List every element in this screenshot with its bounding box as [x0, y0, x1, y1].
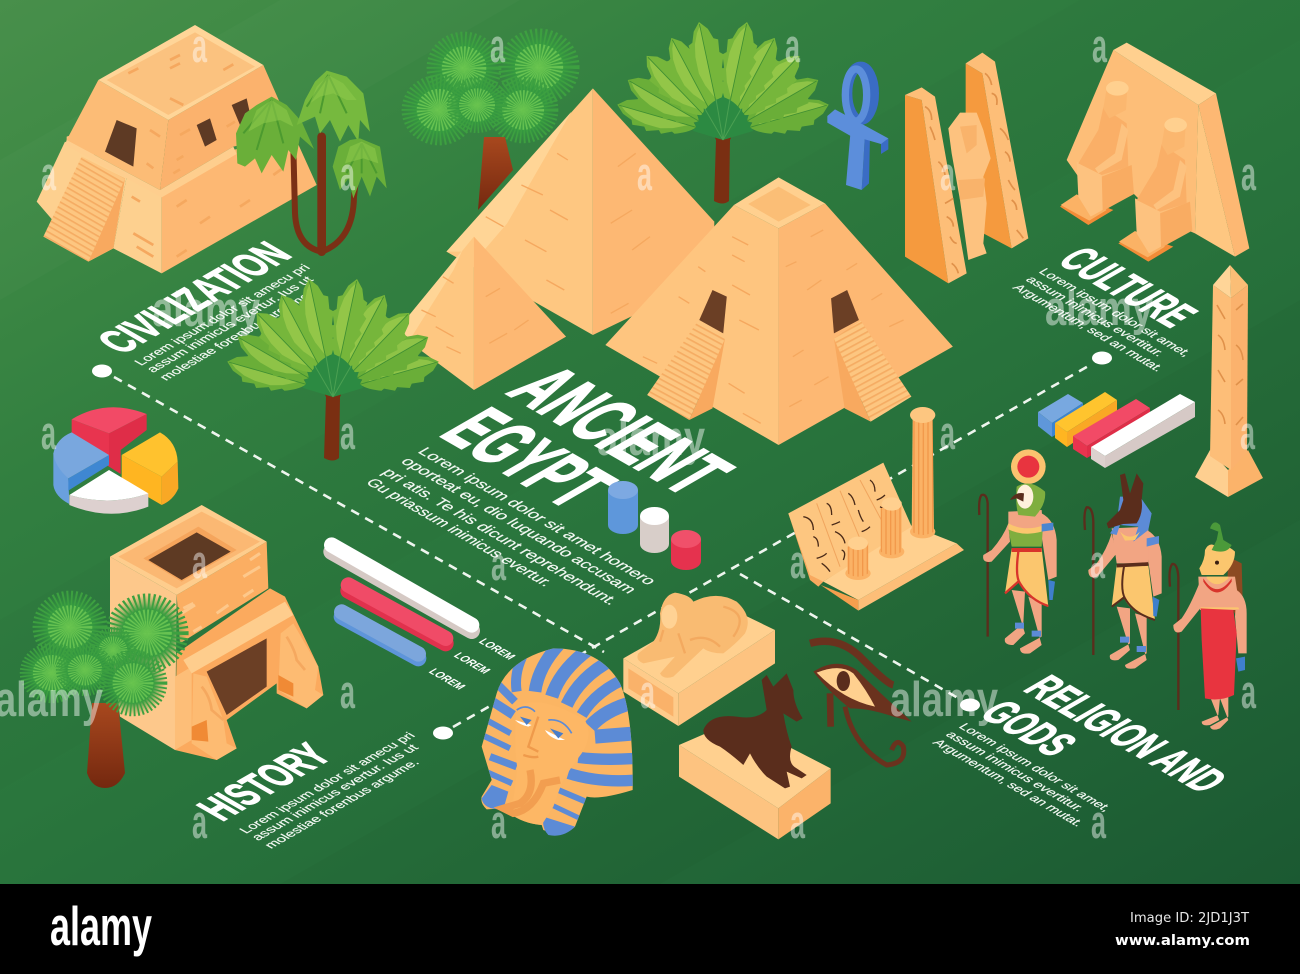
red block	[1073, 399, 1150, 458]
bar chart: rounded rods	[332, 545, 472, 658]
text: culture body: Argumentum, sed an mutat.	[1009, 282, 1168, 374]
left stairs	[647, 321, 725, 420]
yellow slice	[122, 432, 178, 505]
ankh in hand	[1048, 580, 1159, 617]
watermark: repeated a marks: a	[790, 795, 805, 848]
house: civilization	[37, 25, 317, 273]
watermark: repeated a marks: a	[1241, 147, 1256, 200]
watermark: repeated a marks: a	[1240, 406, 1255, 459]
labels: lorem	[425, 636, 519, 692]
jackal on plinth	[679, 673, 831, 839]
watermark: repeated a marks: a	[192, 795, 207, 848]
watermark: alamy words: alamy	[152, 283, 260, 337]
eye of horus	[810, 641, 912, 765]
temple with seated statues	[1060, 43, 1249, 262]
watermark: repeated a marks: a	[491, 537, 506, 590]
text: religion body	[929, 721, 1116, 829]
twin palm trees	[236, 71, 387, 252]
hieroglyph tablet	[788, 463, 912, 587]
text: history body: Lorem ipsum dolor sit amecu pri	[236, 730, 418, 836]
red cylinder	[671, 530, 701, 570]
watermark: repeated a marks: a	[192, 535, 207, 588]
heading: religion and gods	[969, 668, 1239, 799]
watermark: repeated a marks: a	[1092, 19, 1107, 72]
labels: lorem: LOREM	[425, 666, 469, 692]
medium broken column	[879, 497, 904, 558]
node dot: history	[433, 726, 453, 740]
watermark: repeated a marks: a	[940, 147, 955, 200]
footer bar	[0, 884, 1300, 974]
heading: religion and gods: GODS	[969, 693, 1089, 763]
white rod	[332, 545, 472, 631]
labels: lorem: LOREM	[475, 636, 519, 662]
footer bar: alamy	[50, 895, 152, 957]
text: civilization body: molestiae forenbus argume.	[156, 289, 318, 383]
node dot: civilization	[92, 364, 112, 378]
small broken column	[845, 537, 871, 580]
heading: ancient egypt	[422, 355, 751, 520]
blue slice	[53, 432, 109, 504]
watermark: repeated a marks: a	[1090, 535, 1105, 588]
lintel	[183, 602, 293, 673]
watermark: repeated a marks: a	[41, 406, 56, 459]
lower gate frame	[175, 588, 323, 760]
sphinx on plinth	[623, 593, 775, 726]
text: history body: assum inimicus evertur. Ius ut	[248, 742, 422, 843]
blue cylinder	[608, 481, 638, 534]
mask face	[503, 702, 588, 825]
text: religion body: Argumentum, sed an mutat.	[929, 737, 1088, 829]
text: religion body: Lorem ipsum dolor sit amet,	[955, 721, 1116, 814]
watermark: repeated a marks	[41, 19, 1256, 848]
watermark: repeated a marks: a	[192, 19, 207, 72]
blue rod	[342, 612, 418, 658]
carved slabs with figure	[905, 53, 1028, 283]
god figures	[979, 449, 1247, 730]
watermark: repeated a marks: a	[940, 406, 955, 459]
fan palm: top centre	[612, 18, 834, 204]
figure: anubis	[1084, 473, 1162, 669]
stairs	[88, 178, 125, 262]
house: history	[110, 505, 323, 760]
cylinders chart	[608, 481, 701, 570]
text: culture body	[1009, 266, 1196, 374]
watermark: alamy words: alamy	[1045, 282, 1153, 336]
spiky palm: top centre	[403, 30, 578, 210]
heading: civilization: CIVILIZATION	[86, 235, 302, 360]
watermark: alamy words	[0, 282, 1153, 727]
text: culture body: assum inimicus evertitur.	[1022, 274, 1169, 359]
heading: ancient egypt: EGYPT	[422, 397, 634, 520]
watermark: repeated a marks: a	[340, 665, 355, 718]
watermark: repeated a marks: a	[490, 19, 505, 72]
watermark: repeated a marks: a	[640, 665, 655, 718]
figure: horus	[979, 449, 1057, 654]
right door	[831, 290, 859, 333]
watermark: alamy words: alamy	[597, 412, 705, 466]
red slice	[72, 407, 147, 474]
heading: culture: CULTURE	[1046, 241, 1208, 334]
dashed flow lines with node dots	[114, 364, 1092, 727]
yellow block	[1055, 392, 1117, 447]
text: culture body: Lorem ipsum dolor sit amet,	[1035, 266, 1196, 359]
text: civilization body: assum inimicus evertur. Ius ut	[143, 274, 317, 375]
tablet with columns	[788, 407, 964, 611]
door	[105, 120, 137, 167]
white block	[1091, 394, 1195, 468]
doorway	[207, 638, 267, 715]
ankh symbol	[827, 67, 888, 190]
front stepped pyramid	[605, 177, 953, 445]
watermark: repeated a marks: a	[491, 795, 506, 848]
labels: lorem: LOREM	[450, 650, 494, 676]
white slice	[69, 470, 148, 514]
footer bar: www.alamy.com	[1115, 933, 1250, 949]
heading: history: HISTORY	[186, 736, 342, 827]
text: ancient egypt body: oporteat eu, dio luquando accusam	[397, 455, 640, 596]
watermark: repeated a marks: a	[637, 147, 652, 200]
text: ancient egypt body: pri atis. Te his dicunt reprehendunt.	[378, 466, 622, 608]
text: ancient egypt body	[362, 445, 660, 608]
bar chart: colour blocks	[1038, 392, 1195, 468]
heading: ancient egypt: ANCIENT	[489, 355, 751, 507]
right stairs	[834, 321, 911, 422]
big pyramid	[446, 88, 714, 335]
watermark: repeated a marks: a	[340, 147, 355, 200]
left door	[699, 290, 727, 333]
watermark: repeated a marks: a	[340, 406, 355, 459]
fan palm: civilization	[222, 275, 444, 460]
statue one	[1060, 81, 1134, 225]
text: ancient egypt body: Gu priassum inimicus evertur.	[362, 476, 556, 589]
blue block	[1038, 394, 1083, 437]
small pyramid	[396, 237, 566, 390]
tall column	[910, 407, 935, 538]
pie chart	[53, 407, 178, 514]
text: history body: molestiae forenbus argume.	[261, 757, 423, 851]
watermark: alamy words: alamy	[890, 673, 998, 727]
node dot: religion	[960, 698, 980, 712]
white cylinder	[640, 507, 669, 553]
node dot: culture	[1092, 352, 1112, 364]
windows	[197, 98, 250, 147]
footer bar: Image ID: 2JD1J3T	[1130, 910, 1250, 926]
watermark: repeated a marks: a	[1241, 665, 1256, 718]
mask lappets	[482, 785, 575, 836]
watermark: repeated a marks: a	[41, 147, 56, 200]
spiky palm: bottom left	[21, 592, 187, 788]
watermark: repeated a marks: a	[1091, 795, 1106, 848]
statue two	[1118, 118, 1192, 262]
figure: sekhmet	[1170, 522, 1247, 730]
watermark: repeated a marks: a	[785, 19, 800, 72]
watermark: repeated a marks: a	[790, 535, 805, 588]
gate statues	[192, 623, 323, 760]
text: civilization body: Lorem ipsum dolor sit amecu pri	[131, 262, 313, 368]
obelisk	[1195, 265, 1263, 497]
pharaoh mask	[478, 643, 637, 836]
text: religion body: assum inimicus evertitur.	[942, 729, 1089, 814]
pyramids group	[396, 88, 953, 445]
red rod	[348, 585, 446, 643]
roof opening	[148, 532, 231, 580]
text: ancient egypt body: Lorem ipsum dolor sit amet homero	[414, 445, 660, 588]
